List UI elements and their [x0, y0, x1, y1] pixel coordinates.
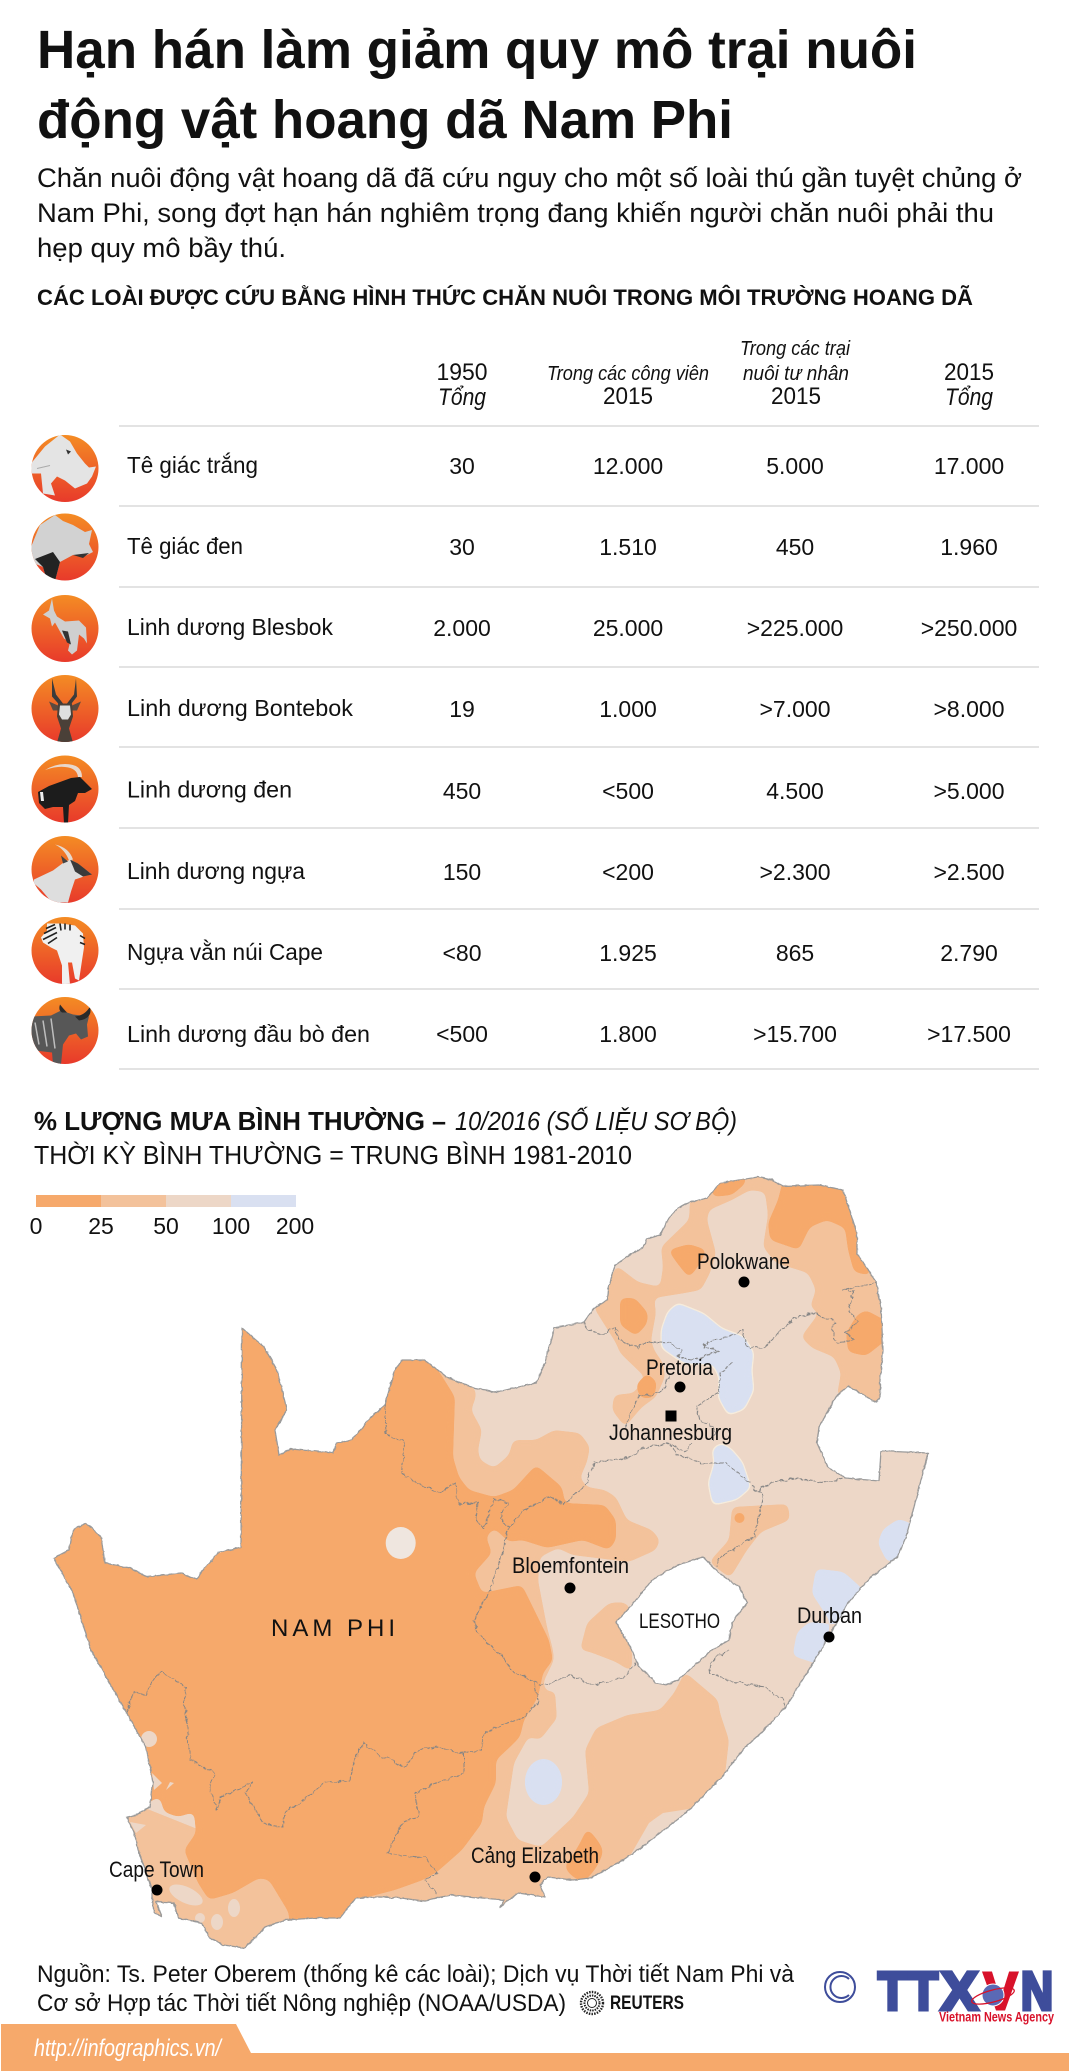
reuters logo	[581, 1992, 684, 2014]
row: Linh dương Bontebok	[32, 675, 1004, 742]
icon: roan antelope	[32, 836, 98, 903]
label: South Africa: NAM PHI	[271, 1615, 395, 1642]
row: Linh dương đầu bò đen: >15.700	[753, 1021, 837, 1047]
row: Linh dương Bontebok: >7.000	[760, 696, 830, 722]
title: động vật hoang dã Nam Phi	[37, 90, 733, 150]
row: Tê giác đen: 30	[449, 534, 475, 560]
table header: nuôi tư nhân	[743, 363, 849, 385]
intro text: Chăn nuôi động vật hoang dã đã cứu nguy cho một số loài thú gần tuyệt chủng ở	[37, 163, 1022, 193]
legend: 25	[88, 1213, 114, 1239]
dot: small dry spot	[734, 1513, 744, 1523]
city: Pretoria: Pretoria	[646, 1355, 714, 1380]
row: Linh dương Blesbok: >225.000	[747, 615, 843, 641]
row: Linh dương ngựa: Linh dương ngựa	[127, 858, 305, 884]
row: Tê giác trắng: 12.000	[593, 453, 663, 479]
row: Tê giác đen: 450	[776, 534, 814, 560]
table header: 2015	[771, 383, 821, 410]
table header: Trong các trại	[740, 338, 851, 360]
row: Linh dương đen: 4.500	[766, 778, 824, 804]
icon: sable antelope	[32, 756, 98, 823]
zone: 50-100 percent coastal lobe	[631, 1809, 689, 1854]
rainfall heading	[34, 1106, 737, 1170]
row: Linh dương đen: Linh dương đen	[127, 776, 292, 802]
city: Durban: Durban	[797, 1603, 862, 1628]
icon: cape mountain zebra	[32, 917, 98, 984]
copyright symbol	[825, 1972, 855, 2002]
row: Ngựa vằn núi Cape: 2.790	[940, 940, 998, 966]
city: Bloemfontein	[512, 1553, 629, 1594]
icon: blesbok	[32, 595, 98, 662]
TTXVN logo: V	[983, 1962, 1018, 2022]
row: Linh dương ngựa: >2.300	[760, 859, 830, 885]
city: Polokwane	[697, 1249, 790, 1288]
source: Cơ sở Hợp tác Thời tiết Nông nghiệp (NOAA/USDA)	[37, 1990, 566, 2017]
TTXVN logo: X	[941, 1962, 978, 2022]
zone: 50-100 percent patches	[130, 1731, 240, 1930]
city: Bloemfontein: Bloemfontein	[512, 1553, 629, 1578]
city: Cape Town: Cape Town	[109, 1857, 204, 1882]
table header	[436, 338, 994, 411]
row: Ngựa vằn núi Cape	[32, 917, 998, 984]
icon: black rhino	[31, 514, 98, 581]
table header: Tổng	[438, 384, 487, 411]
rainfall heading: 10/2016 (SỐ LIỆU SƠ BỘ)	[455, 1106, 737, 1136]
footer bar	[1, 2024, 1069, 2071]
row: Tê giác đen	[31, 514, 998, 581]
row: Linh dương ngựa: >2.500	[934, 859, 1004, 885]
row: Tê giác đen: 1.960	[940, 534, 998, 560]
city: Port Elizabeth: Cảng Elizabeth	[471, 1843, 599, 1868]
row: Linh dương Blesbok: Linh dương Blesbok	[127, 614, 333, 640]
city: Pretoria	[646, 1355, 714, 1392]
row: Tê giác trắng: 30	[449, 453, 475, 479]
row: Tê giác đen: 1.510	[599, 534, 657, 560]
city: Port Elizabeth	[471, 1843, 599, 1882]
rainfall heading: –	[432, 1106, 446, 1136]
row: Linh dương đầu bò đen	[31, 997, 1011, 1064]
row: Linh dương ngựa: <200	[602, 859, 654, 885]
row: Linh dương Bontebok: 19	[449, 696, 475, 722]
row: Linh dương đen: 450	[443, 778, 481, 804]
legend: 50	[153, 1213, 179, 1239]
source: Nguồn: Ts. Peter Oberem (thống kê các loài); Dịch vụ Thời tiết Nam Phi và	[37, 1961, 795, 1988]
intro text	[37, 163, 1022, 263]
title: Hạn hán làm giảm quy mô trại nuôi	[37, 20, 917, 80]
city: Durban	[797, 1603, 862, 1642]
intro text: Nam Phi, song đợt hạn hán nghiêm trọng đang khiến người chăn nuôi phải thu	[37, 198, 994, 228]
row: Linh dương đen	[32, 756, 1004, 823]
table header: 2015	[603, 383, 653, 410]
TTXVN logo: N	[1021, 1962, 1053, 2022]
table header: Tổng	[945, 384, 994, 411]
title	[37, 20, 917, 150]
table header: Trong các công viên	[547, 363, 709, 385]
icon: white rhino	[31, 434, 98, 502]
row: Linh dương đầu bò đen: <500	[436, 1021, 488, 1047]
TTXVN logo	[878, 1962, 1054, 2024]
provincial borders	[126, 1283, 876, 1893]
legend: 100	[212, 1213, 250, 1239]
TTXVN logo: T	[909, 1962, 938, 2022]
row: Linh dương Bontebok: >8.000	[934, 696, 1004, 722]
city: Johannesburg	[609, 1410, 732, 1445]
row: Tê giác trắng: 17.000	[934, 453, 1004, 479]
row: Linh dương đen: >5.000	[934, 778, 1004, 804]
intro text: hẹp quy mô bầy thú.	[37, 233, 286, 263]
legend: 200	[276, 1213, 314, 1239]
row: Ngựa vằn núi Cape: <80	[442, 940, 482, 966]
row: Tê giác trắng	[31, 434, 1004, 502]
rainfall heading: THỜI KỲ BÌNH THƯỜNG = TRUNG BÌNH 1981-2010	[34, 1140, 632, 1170]
row: Linh dương Blesbok	[32, 595, 1017, 662]
row: Linh dương ngựa: 150	[443, 859, 481, 885]
zone: cream outline of wet areas	[663, 1305, 752, 1503]
row: Linh dương Blesbok: >250.000	[921, 615, 1017, 641]
row: Ngựa vằn núi Cape: 865	[776, 940, 814, 966]
city: Polokwane: Polokwane	[697, 1249, 790, 1274]
row: Tê giác đen: Tê giác đen	[127, 533, 243, 559]
row: Linh dương đen: <500	[602, 778, 654, 804]
coastline and national border	[54, 1177, 928, 1948]
source	[37, 1961, 795, 2017]
row: Linh dương đầu bò đen: >17.500	[927, 1021, 1011, 1047]
label: Lesotho: LESOTHO	[639, 1610, 720, 1633]
reuters logo: REUTERS	[610, 1993, 684, 2014]
map: South Africa rainfall	[52, 1176, 930, 1949]
TTXVN logo: T	[878, 1962, 907, 2022]
rainfall heading: % LƯỢNG MƯA BÌNH THƯỜNG	[34, 1106, 425, 1136]
legend	[30, 1195, 314, 1239]
row: Ngựa vằn núi Cape: 1.925	[599, 940, 657, 966]
city: Johannesburg: Johannesburg	[609, 1420, 732, 1445]
row: Linh dương Blesbok: 25.000	[593, 615, 663, 641]
zone: 0-25 percent	[0, 1175, 890, 1930]
row: Tê giác trắng: Tê giác trắng	[127, 452, 258, 478]
row: Linh dương ngựa	[32, 836, 1004, 903]
row: Linh dương đầu bò đen: Linh dương đầu bò đen	[127, 1021, 370, 1047]
legend: 0	[30, 1213, 42, 1239]
table heading: CÁC LOÀI ĐƯỢC CỨU BẰNG HÌNH THỨC CHĂN NUÔI TRONG MÔI TRƯỜNG HOANG DÃ	[37, 285, 973, 310]
footer bar: http://infographics.vn/	[34, 2035, 223, 2062]
zone: pale spot	[386, 1527, 416, 1559]
row: Tê giác trắng: 5.000	[766, 453, 824, 479]
table header: 2015	[944, 359, 994, 386]
icon: black wildebeest	[31, 997, 98, 1064]
row: Linh dương Bontebok: Linh dương Bontebok	[127, 695, 354, 721]
row: Ngựa vằn núi Cape: Ngựa vằn núi Cape	[127, 939, 323, 965]
row: Linh dương đầu bò đen: 1.800	[599, 1021, 657, 1047]
table header: 1950	[436, 359, 488, 386]
zone: 25-50 percent	[100, 1170, 900, 1960]
row: Linh dương Blesbok: 2.000	[433, 615, 491, 641]
zone: 100-200 percent	[526, 1305, 914, 1804]
city: Cape Town	[109, 1857, 204, 1896]
icon: bontebok	[32, 675, 98, 742]
cities	[109, 1249, 862, 1896]
row: Linh dương Bontebok: 1.000	[599, 696, 657, 722]
